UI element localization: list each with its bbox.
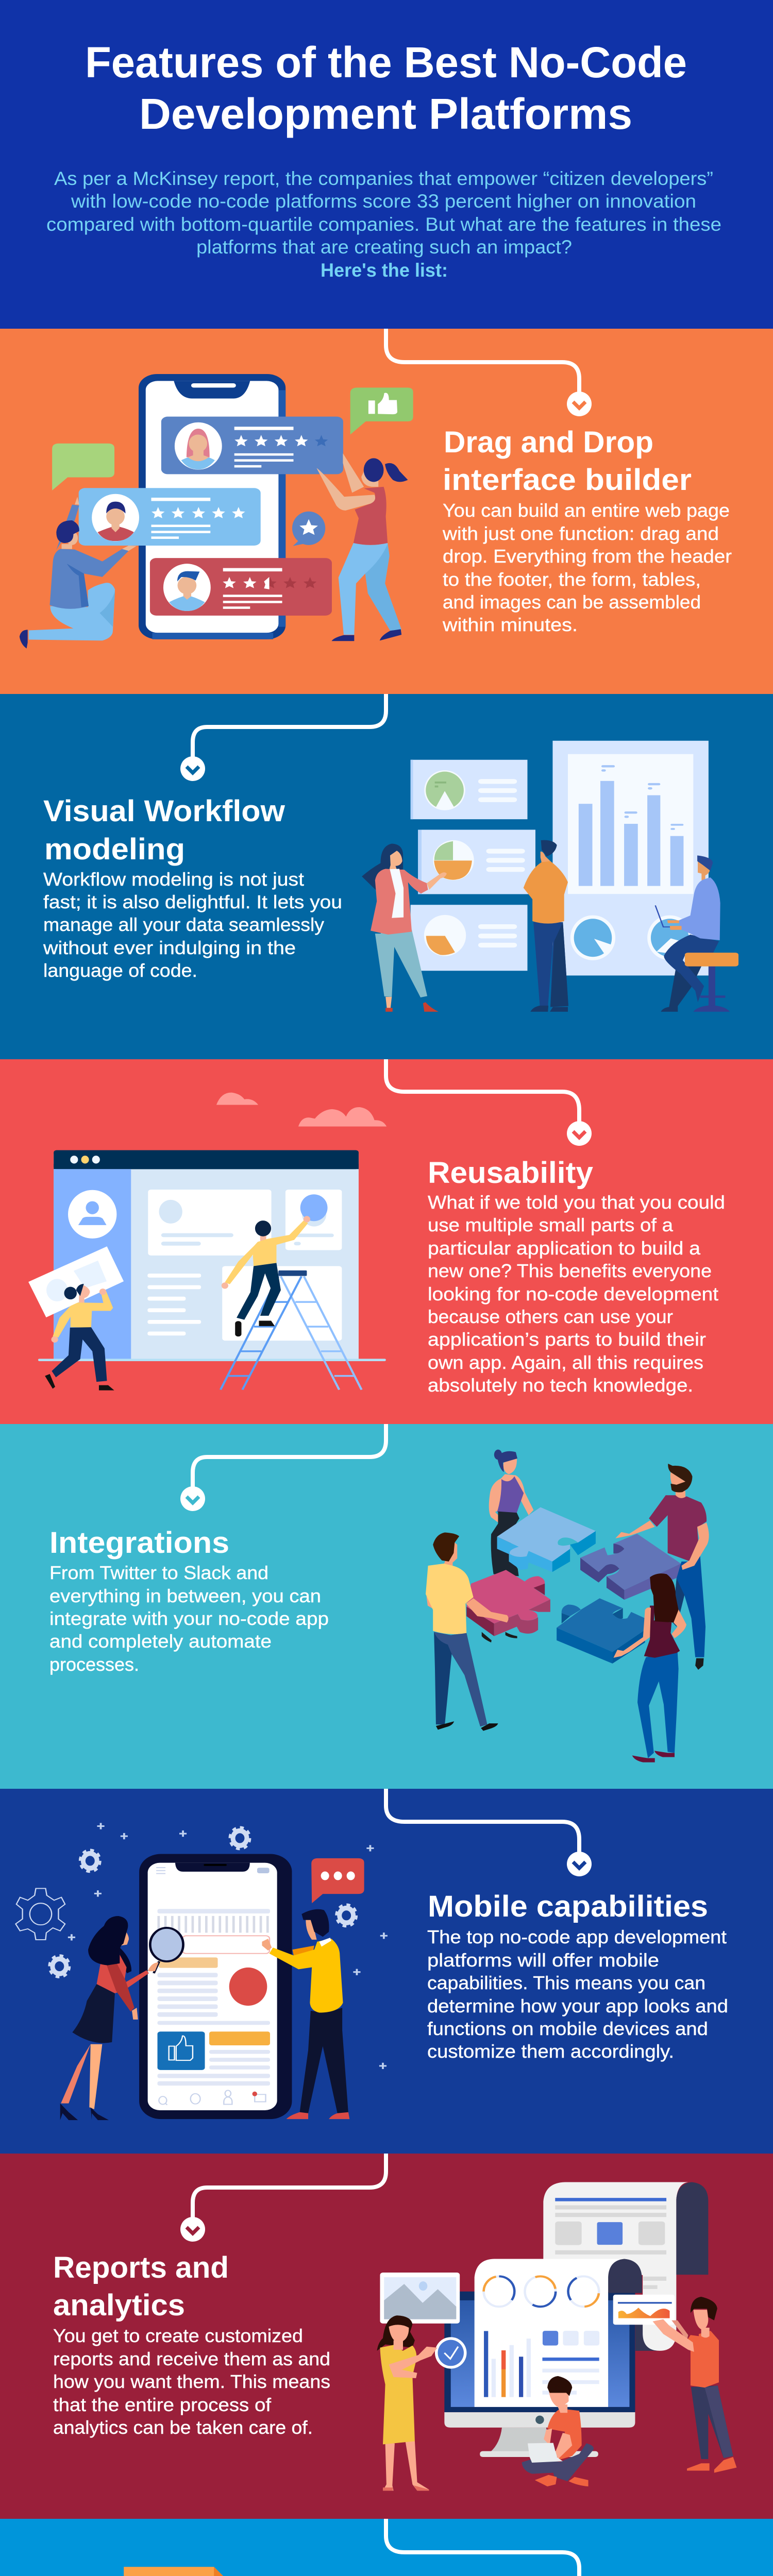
text: drag and drop body [442, 500, 732, 635]
text: reusability body: What if we told you that you could [428, 1192, 725, 1213]
text: mobile capabilities body: platforms will offer mobile [427, 1950, 659, 1971]
heading: reports and analytics: analytics [53, 2289, 185, 2322]
figure: woman top [482, 1450, 533, 1642]
icon: check badge [435, 2337, 467, 2369]
text: intro paragraph: with low-code no-code platforms score 33 percent higher on innovation [71, 191, 696, 212]
figure: woman bottom [613, 1573, 686, 1762]
panel: front dashboard [475, 2259, 642, 2407]
card: pie orange [411, 905, 527, 971]
arrow: connector 2 [180, 694, 386, 781]
text: reusability body: use multiple small parts of a [428, 1214, 674, 1235]
title: Development Platforms [139, 90, 632, 138]
text: reusability body: own app. Again, all this requires [428, 1352, 703, 1373]
text: reusability body: because others can use your [428, 1306, 673, 1327]
text: visual workflow body: fast; it is also delightful. It lets you [43, 891, 342, 912]
heading: visual workflow [43, 794, 285, 866]
illustration: analytics monitor and reports [377, 2182, 736, 2490]
icon: pink puzzle piece [466, 1570, 550, 1636]
figure: bearded man [615, 1464, 709, 1670]
text: reusability body: particular application to build a [428, 1238, 701, 1259]
figure: woman with magnifier [60, 1916, 183, 2120]
text: drag and drop body: You can build an entire web page [443, 500, 730, 521]
icon: phone [139, 374, 285, 639]
panel: header [0, 0, 773, 329]
text: drag and drop body: drop. Everything from the header [443, 546, 732, 567]
figure: presenting woman [362, 844, 447, 1012]
illustration: phone with two people [15, 1823, 388, 2120]
illustration: document on laptop [23, 2567, 416, 2576]
panel: integrations [0, 1424, 773, 1789]
text: mobile capabilities body: functions on mobile devices and [427, 2018, 708, 2039]
figure: person on ladder [222, 1216, 310, 1336]
heading: mobile capabilities: Mobile capabilities [428, 1890, 708, 1923]
text: integrations body: integrate with your no-code app [49, 1608, 329, 1629]
illustration: website builder [28, 1093, 386, 1391]
arrow: connector 6 [180, 2154, 386, 2242]
arrow: connector 3 [386, 1059, 592, 1146]
text: visual workflow body: manage all your data seamlessly [43, 914, 324, 935]
text: intro paragraph [46, 168, 721, 281]
panel: back report scroll [543, 2182, 708, 2351]
icon: clouds [216, 1093, 386, 1127]
chart: big bar chart board [552, 741, 709, 975]
icon: ladder [221, 1276, 362, 1389]
text: visual workflow body: without ever indulging in the [43, 937, 296, 958]
heading: reusability: Reusability [428, 1156, 593, 1190]
text: integrations body: processes. [49, 1654, 139, 1675]
text: reusability body [428, 1192, 725, 1396]
panel: reports and analytics [0, 2154, 773, 2519]
figure: person carrying card [28, 1246, 124, 1391]
illustration: phone with rating cards [20, 374, 413, 649]
card: pie green and orange [418, 829, 535, 894]
heading: integrations: Integrations [49, 1526, 229, 1560]
heading: drag and drop: interface builder [443, 463, 692, 497]
figure: man in yellow shirt [426, 1533, 509, 1731]
heading: reports and analytics: Reports and [53, 2251, 229, 2284]
icon: phone screen [139, 1854, 292, 2119]
panel: browser window [38, 1150, 386, 1361]
text: visual workflow body [43, 869, 342, 981]
text: mobile capabilities body: The top no-code app development [427, 1926, 727, 1947]
icon: purple puzzle piece [580, 1534, 681, 1600]
panel: mobile capabilities [0, 1789, 773, 2154]
figure: woman in yellow dress [377, 2315, 438, 2490]
text: reusability body: new one? This benefits everyone [428, 1260, 712, 1281]
heading: visual workflow: modeling [44, 833, 185, 866]
illustration: dashboard presentation [362, 741, 738, 1012]
icon: green speech bubble [52, 444, 114, 490]
arrow: connector 7 [386, 2519, 592, 2576]
text: intro paragraph: compared with bottom-quartile companies. But what are the features in these [46, 214, 721, 235]
icon: gears [49, 1828, 356, 1977]
text: mobile capabilities body [427, 1926, 728, 2062]
text: drag and drop body: and images can be assembled [443, 591, 701, 613]
text: reusability body: looking for no-code development [428, 1283, 718, 1304]
arrow: connector 4 [180, 1424, 386, 1511]
text: integrations body: From Twitter to Slack and [49, 1562, 268, 1583]
heading: reports and analytics [53, 2251, 229, 2322]
text: reports body: how you want them. This means [53, 2371, 330, 2392]
panel: visual workflow [0, 694, 773, 1059]
card: pie green [411, 760, 527, 819]
icon: green speech bubble with thumb [350, 387, 413, 435]
heading: visual workflow: Visual Workflow [43, 794, 285, 828]
text: drag and drop body: with just one function: drag and [442, 523, 719, 544]
icon: plus signs [68, 1823, 388, 2069]
text: reports body: that the entire process of [53, 2394, 272, 2415]
card: woman review [161, 417, 343, 474]
text: integrations body: and completely automate [49, 1631, 272, 1652]
figure: man in yellow sweater [262, 1909, 349, 2119]
text: drag and drop body: within minutes. [442, 614, 578, 635]
icon: red chat bubble [311, 1858, 364, 1903]
text: visual workflow body: language of code. [43, 960, 197, 981]
figure: seated man [522, 2376, 594, 2486]
title [85, 38, 687, 138]
text: reports body: analytics can be taken care of. [53, 2417, 313, 2438]
panel: document generator [0, 2519, 773, 2576]
text: visual workflow body: Workflow modeling is not just [43, 869, 304, 890]
text: intro paragraph: As per a McKinsey report, the companies that empower “citizen developers” [54, 168, 713, 189]
icon: monitor [444, 2292, 635, 2457]
text: reusability body: absolutely no tech knowledge. [428, 1375, 693, 1396]
icon: dark blue puzzle piece [557, 1598, 645, 1664]
text: mobile capabilities body: customize them accordingly. [427, 2041, 674, 2062]
heading: drag and drop: Drag and Drop [444, 426, 653, 459]
icon: image card [380, 2273, 460, 2324]
illustration: team assembling puzzle [426, 1450, 709, 1762]
figure: standing man [652, 2297, 736, 2473]
text: reports body: You get to create customized [53, 2325, 303, 2346]
icon: orange document [124, 2567, 283, 2576]
text: mobile capabilities body: determine how your app looks and [427, 1995, 728, 2016]
arrow: connector 5 [386, 1789, 592, 1876]
figure: kneeling man [20, 497, 137, 649]
text: intro paragraph: Here's the list: [321, 260, 448, 281]
panel: reusability [0, 1059, 773, 1424]
icon: star bubble [292, 512, 325, 546]
chart: small area chart card [613, 2295, 675, 2325]
heading: drag and drop [443, 426, 692, 497]
arrow: connector 1 [386, 329, 592, 416]
icon: outlined gear [15, 1888, 65, 1940]
card: low rating review [150, 558, 332, 616]
text: drag and drop body: to the footer, the form, tables, [443, 569, 701, 590]
text: intro paragraph: platforms that are creating such an impact? [196, 236, 572, 258]
text: reports body [53, 2325, 330, 2438]
text: reusability body: application’s parts to build their [428, 1329, 706, 1350]
figure: seated man [656, 855, 738, 1012]
title: Features of the Best No-Code [85, 38, 687, 87]
text: integrations body: everything in between, you can [49, 1585, 321, 1606]
text: reports body: reports and receive them as and [53, 2348, 330, 2369]
text: mobile capabilities body: capabilities. This means you can [427, 1972, 705, 1993]
figure: standing woman [316, 453, 408, 641]
figure: standing man [524, 840, 568, 1012]
icon: light blue puzzle piece [497, 1507, 596, 1572]
panel: drag and drop [0, 329, 773, 694]
card: man review [79, 488, 261, 546]
text: integrations body [49, 1562, 329, 1675]
